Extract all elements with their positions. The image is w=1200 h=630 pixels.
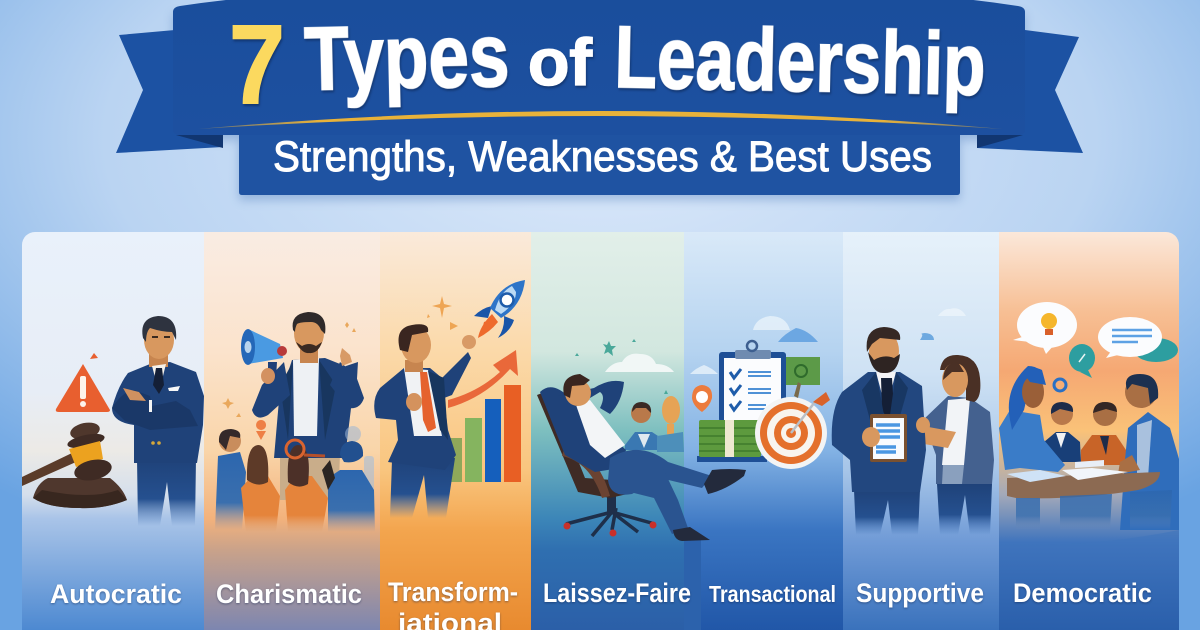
sparkles <box>575 339 668 394</box>
main ribbon <box>173 0 1025 135</box>
panel: transformational <box>374 232 531 630</box>
clouds <box>690 316 790 374</box>
label: first line: Transform- <box>388 577 518 607</box>
panel background <box>380 232 531 630</box>
right ribbon tail <box>977 30 1083 153</box>
icon: teal bubble small <box>1069 344 1095 378</box>
panel background <box>843 232 999 630</box>
figure: charismatic leader <box>252 312 364 500</box>
title banner <box>116 0 1083 200</box>
gold line <box>198 111 1003 129</box>
laissez-faire figures and label, overlapping the next panel <box>537 374 746 608</box>
panel background <box>22 232 204 630</box>
label: Democratic <box>1013 578 1152 608</box>
meeting table <box>1007 460 1160 498</box>
right ribbon fold <box>977 135 1023 148</box>
icon: blue cloud <box>778 328 818 342</box>
figure: supportive man <box>832 327 930 535</box>
icon: audience balloon <box>256 420 266 440</box>
legs under table <box>1016 490 1172 530</box>
subtitle: Strengths, Weaknesses & Best Uses <box>273 133 932 181</box>
title: 7: 7 <box>229 2 285 127</box>
title: Types: Types <box>303 6 510 110</box>
panel: transactional <box>684 232 843 630</box>
icon: cash stack <box>697 420 767 462</box>
icon: rocket <box>474 280 525 338</box>
label: Autocratic <box>50 579 182 609</box>
icon: speech bubble with lightbulb <box>1013 302 1077 354</box>
clouds <box>938 308 966 316</box>
icon: megaphone <box>241 329 287 384</box>
label: Charismatic <box>216 579 362 609</box>
panel: democratic <box>999 232 1188 630</box>
figure: supportive woman <box>923 355 994 535</box>
icon: speech bubble with text lines <box>1098 317 1162 358</box>
label: Laissez-Faire <box>543 578 691 608</box>
ground <box>999 530 1179 545</box>
small colleagues <box>625 396 684 452</box>
icon: gavel <box>22 420 127 508</box>
figure: reclining leader in chair <box>537 374 746 541</box>
label: Transactional <box>709 581 836 607</box>
figure: transformational leader <box>374 324 476 518</box>
panel: autocratic <box>22 232 204 630</box>
title: Leadership: Leadership <box>614 7 987 114</box>
panel background <box>684 232 843 630</box>
banner shadow <box>173 14 1025 200</box>
lower band continuing the left panel <box>684 540 701 630</box>
title: of: of <box>528 25 593 99</box>
panels group <box>22 232 1188 630</box>
panel: supportive <box>832 232 999 630</box>
icon: teal bubble right <box>1134 338 1178 362</box>
panel: laissez-faire background <box>531 232 684 630</box>
panel background <box>999 232 1179 630</box>
icon: rising arrow <box>448 350 518 408</box>
woman at left <box>999 366 1066 472</box>
icon: sparkle star <box>427 296 458 330</box>
sparkles <box>222 322 356 417</box>
label: Supportive <box>856 578 984 608</box>
figure: autocratic leader <box>112 316 204 526</box>
left ribbon tail <box>116 30 223 153</box>
left ribbon fold <box>176 135 223 148</box>
icon: checklist clipboard <box>719 341 786 422</box>
icon: rising bar chart <box>450 385 521 482</box>
clipboard <box>870 414 907 462</box>
icon: cloud <box>605 354 674 372</box>
panel background <box>204 232 380 630</box>
icon: map pin <box>692 385 712 412</box>
icon: blue cloud <box>920 333 934 340</box>
panel: charismatic <box>204 232 380 630</box>
people behind table <box>1044 402 1126 465</box>
icon: ghost figures <box>345 426 374 496</box>
icon: banknote <box>784 357 820 385</box>
audience <box>215 429 375 532</box>
man at right <box>1118 374 1188 530</box>
subtitle ribbon <box>239 125 960 195</box>
icon: warning triangle <box>56 353 110 412</box>
icon: target with dart <box>755 382 830 469</box>
panel background <box>531 232 684 630</box>
